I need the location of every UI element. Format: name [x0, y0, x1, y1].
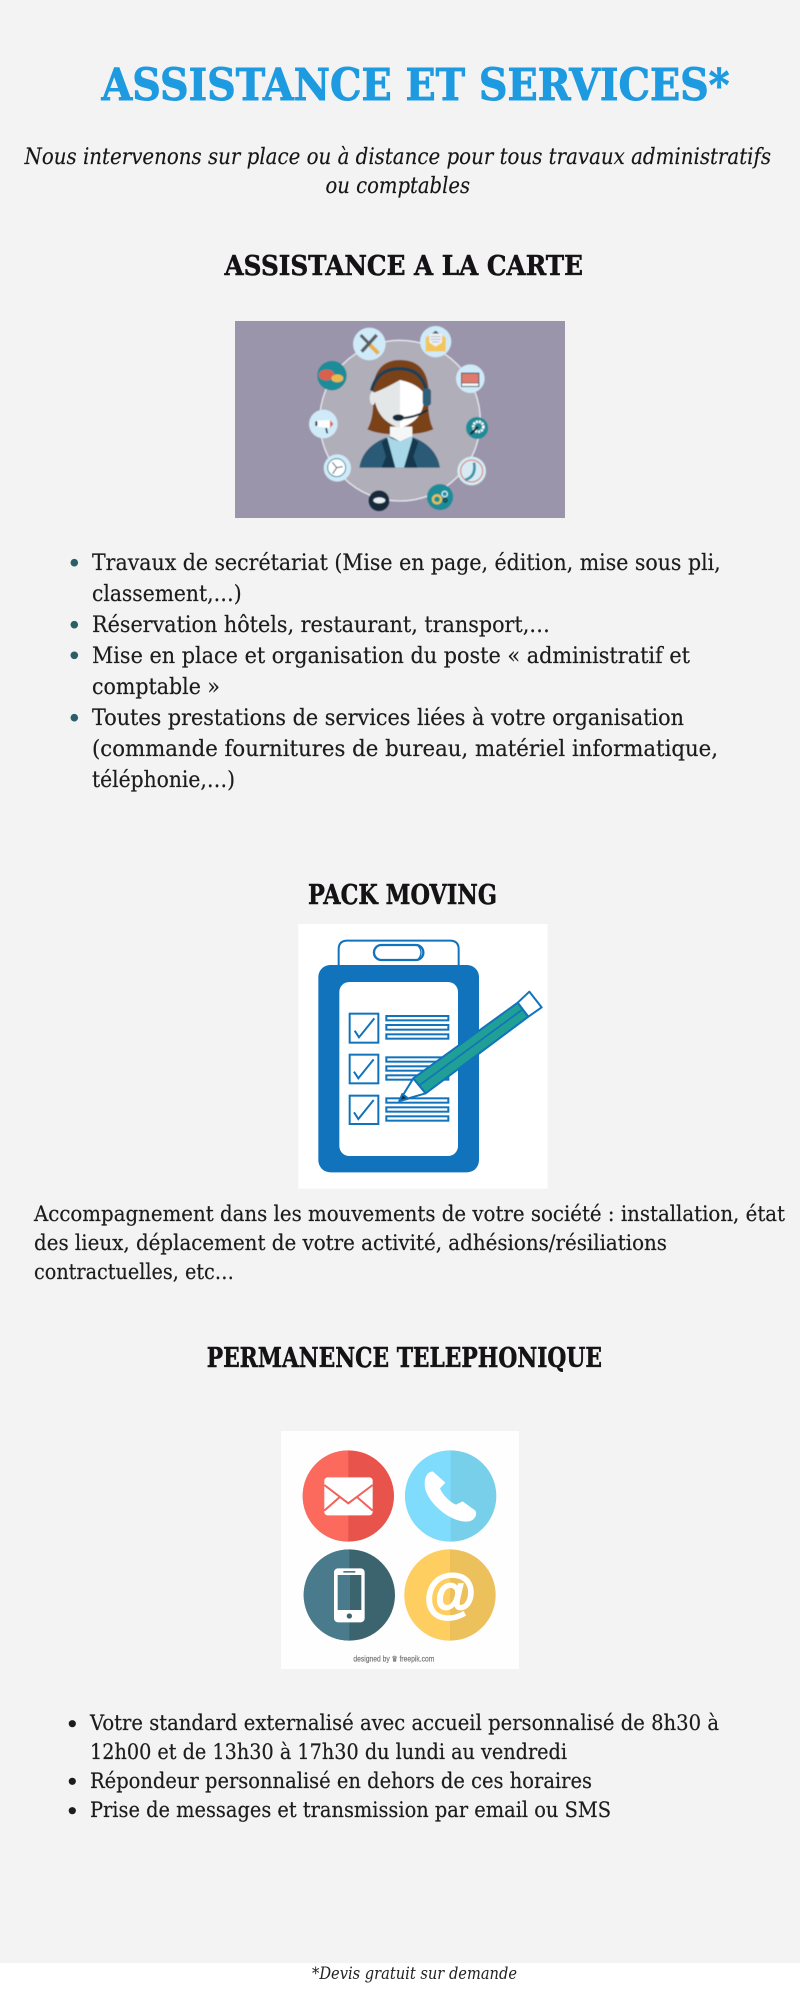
list: telephone services: Votre standard externalisé avec accueil personnalisé de 8h30 à — [89, 1711, 719, 1736]
paragraph: pack moving: contractuelles, etc… — [34, 1260, 234, 1285]
image: clipboard checklist — [298, 924, 548, 1189]
list: assistance services: comptable » — [92, 674, 220, 700]
list: assistance services: téléphonie,…) — [92, 767, 235, 793]
list: telephone services: 12h00 et de 13h30 à 17h30 du lundi au vendredi — [90, 1740, 567, 1765]
icon: gear and wrench — [466, 417, 488, 439]
icon: megaphone — [309, 410, 338, 438]
image: contact icons — [281, 1431, 519, 1669]
icon: calendar — [456, 364, 485, 393]
list: telephone services: Prise de messages et transmission par email ou SMS — [90, 1798, 611, 1823]
icon: smartphone — [304, 1549, 395, 1641]
title: ASSISTANCE ET SERVICES* — [101, 60, 730, 111]
list: assistance services: (commande fournitures de bureau, matériel informatique, — [92, 736, 718, 762]
footer note: *Devis gratuit sur demande — [312, 1964, 517, 1984]
heading: pack moving: PACK MOVING — [308, 880, 497, 911]
paragraph: pack moving: des lieux, déplacement de votre activité, adhésions/résiliations — [34, 1231, 667, 1256]
list: telephone services — [69, 1711, 719, 1823]
icon: envelope — [303, 1450, 394, 1542]
list: telephone services: Répondeur personnalisé en dehors de ces horaires — [90, 1769, 592, 1794]
intro text — [24, 145, 771, 199]
list: assistance services: Mise en place et organisation du poste « administratif et — [92, 643, 690, 669]
freepik credit: designed by ♛ freepik.com — [353, 1655, 435, 1664]
icon: gears — [427, 484, 453, 510]
heading: permanence telephonique: PERMANENCE TELEPHONIQUE — [207, 1343, 602, 1374]
list: assistance services — [70, 550, 721, 793]
heading: assistance a la carte: ASSISTANCE A LA CARTE — [224, 251, 583, 282]
icon: phone — [457, 457, 486, 485]
icon: telephone — [405, 1450, 496, 1542]
list: assistance services: Réservation hôtels, restaurant, transport,… — [92, 612, 550, 638]
image: call centre agent — [235, 321, 565, 518]
list: assistance services: classement,…) — [92, 581, 242, 607]
agent figure — [359, 360, 440, 468]
pencil — [399, 992, 542, 1101]
icon: mail — [420, 326, 451, 357]
icon: at sign — [404, 1549, 496, 1641]
list: assistance services: Travaux de secrétariat (Mise en page, édition, mise sous pli, — [92, 550, 721, 576]
icon: clock — [324, 454, 351, 482]
icon: chat bubbles — [317, 361, 347, 390]
icon: handshake — [369, 490, 389, 511]
paragraph: pack moving — [33, 1202, 785, 1285]
intro text: ou comptables — [326, 174, 470, 199]
icon: at sign: @ — [424, 1564, 476, 1623]
list: assistance services: Toutes prestations de services liées à votre organisation — [92, 705, 684, 731]
icon: tools — [353, 328, 386, 360]
footer strip — [0, 1963, 800, 2000]
